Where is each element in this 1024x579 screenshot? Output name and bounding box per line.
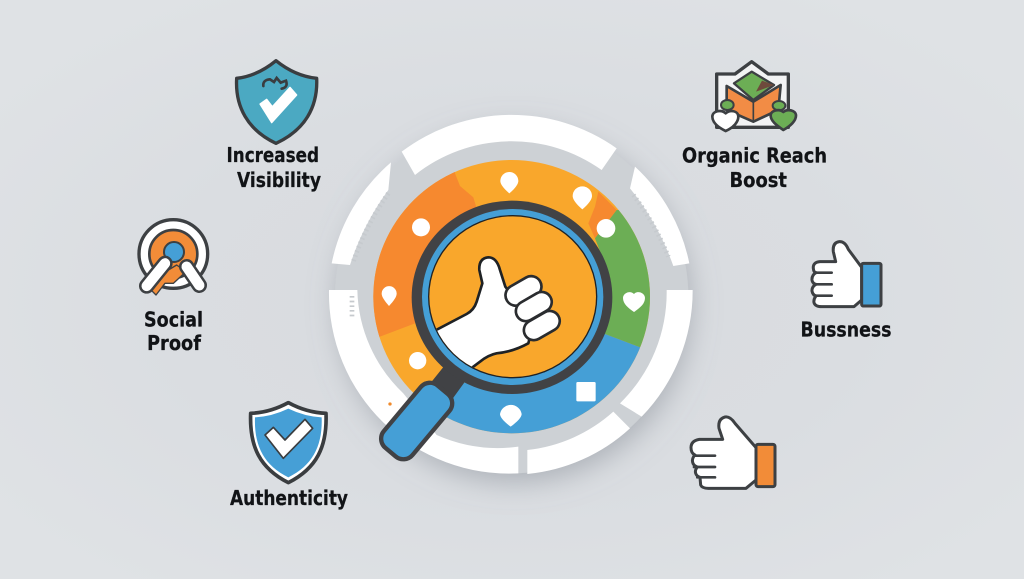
label: organic reach boost: Boost: [730, 168, 787, 192]
label: social proof: [144, 308, 203, 355]
label: authenticity: Authenticity: [230, 486, 348, 510]
label: organic reach boost: [682, 144, 827, 192]
handle: [376, 378, 457, 464]
icon: social proof target: [139, 220, 208, 295]
label: increased visibility: Increased: [226, 143, 319, 167]
label: social proof: Proof: [147, 331, 201, 355]
label: organic reach boost: Organic Reach: [682, 144, 827, 168]
icon: orange cuff thumbs up: [691, 417, 775, 488]
label: business: Bussness: [800, 318, 892, 342]
thumbs up hand: [436, 256, 562, 368]
handle neck: [432, 365, 465, 400]
segmented colour disc: [373, 160, 650, 434]
icon: organic reach box: [712, 62, 796, 131]
grey ring base: [335, 120, 688, 473]
label: increased visibility: [226, 143, 321, 192]
label: increased visibility: Visibility: [237, 168, 321, 192]
icon: authenticity shield: [251, 403, 326, 483]
icon: blue cuff thumbs up: [812, 242, 881, 307]
label: social proof: Social: [144, 308, 203, 332]
magnifying glass: [376, 201, 612, 464]
ring tick marks: [352, 193, 668, 319]
white ring segments: [329, 115, 693, 474]
lens frame: [412, 201, 612, 394]
disc markers: [382, 172, 645, 427]
central graphic: [329, 115, 693, 477]
icon: increased visibility shield: [237, 61, 317, 143]
